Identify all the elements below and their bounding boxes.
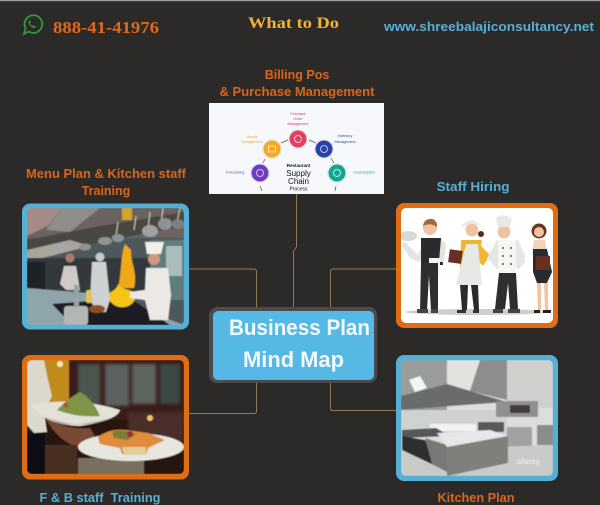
supply chain diagram: Process <box>289 186 308 192</box>
card frame <box>22 204 189 330</box>
panel: billing pos: & Purchase Management <box>220 85 375 99</box>
header <box>24 15 595 37</box>
central node: business plan mind map: Business Plan <box>229 315 370 340</box>
central node: business plan mind map <box>209 307 377 383</box>
panel: staff hiring <box>396 180 558 328</box>
illustration: four staff figures <box>399 215 552 315</box>
supply chain diagram <box>209 103 384 194</box>
waiter <box>399 219 446 313</box>
waitress in black dress <box>532 224 552 313</box>
card frame <box>22 355 189 480</box>
heading: staff hiring: Staff Hiring <box>436 180 510 194</box>
waitress with clipboard <box>448 220 490 313</box>
supply chain diagram: Consumption <box>353 170 375 174</box>
panel: billing pos <box>209 68 384 194</box>
supply chain diagram: Purchase <box>290 112 306 116</box>
heading: f and b training: F & B staff Training <box>40 491 160 505</box>
heading: what to do: What to Do <box>248 15 339 32</box>
chef <box>487 215 525 313</box>
panel: menu plan and kitchen staff training <box>22 167 189 330</box>
supply chain diagram: Management <box>335 140 355 144</box>
card frame <box>396 203 558 328</box>
phone number: 888-41-41976 <box>53 18 159 37</box>
heading: kitchen plan: Kitchen Plan <box>438 491 514 505</box>
card frame <box>396 355 558 481</box>
photo: steel kitchen: alamy <box>517 457 540 466</box>
supply chain diagram: Inventory <box>338 134 353 138</box>
panel: menu plan and kitchen staff training: Training <box>82 184 130 198</box>
supply chain diagram: Management <box>242 140 262 144</box>
photo: chefs cooking <box>27 208 184 325</box>
supply chain diagram: Management <box>288 122 308 126</box>
supply chain diagram: Vendor <box>246 135 258 139</box>
supply chain diagram: Forecasting <box>226 170 244 174</box>
supply chain diagram: Chain <box>288 177 309 186</box>
central node: business plan mind map: Mind Map <box>243 347 344 372</box>
supply chain diagram: Restaurant <box>287 163 311 168</box>
heading: menu plan: Menu Plan & Kitchen staff <box>26 167 187 181</box>
panel: kitchen plan <box>396 355 558 505</box>
supply chain diagram: Order <box>293 117 303 121</box>
photo: steel kitchen <box>401 360 553 476</box>
connector lines <box>189 194 396 414</box>
heading: billing: Billing Pos <box>265 68 329 82</box>
supply chain diagram: Supply <box>286 169 311 178</box>
photo: waiter serving plates <box>27 360 184 474</box>
website: www.shreebalajiconsultancy.net <box>383 19 595 34</box>
icon: whatsapp <box>24 15 42 34</box>
panel: f and b staff training <box>22 355 189 505</box>
